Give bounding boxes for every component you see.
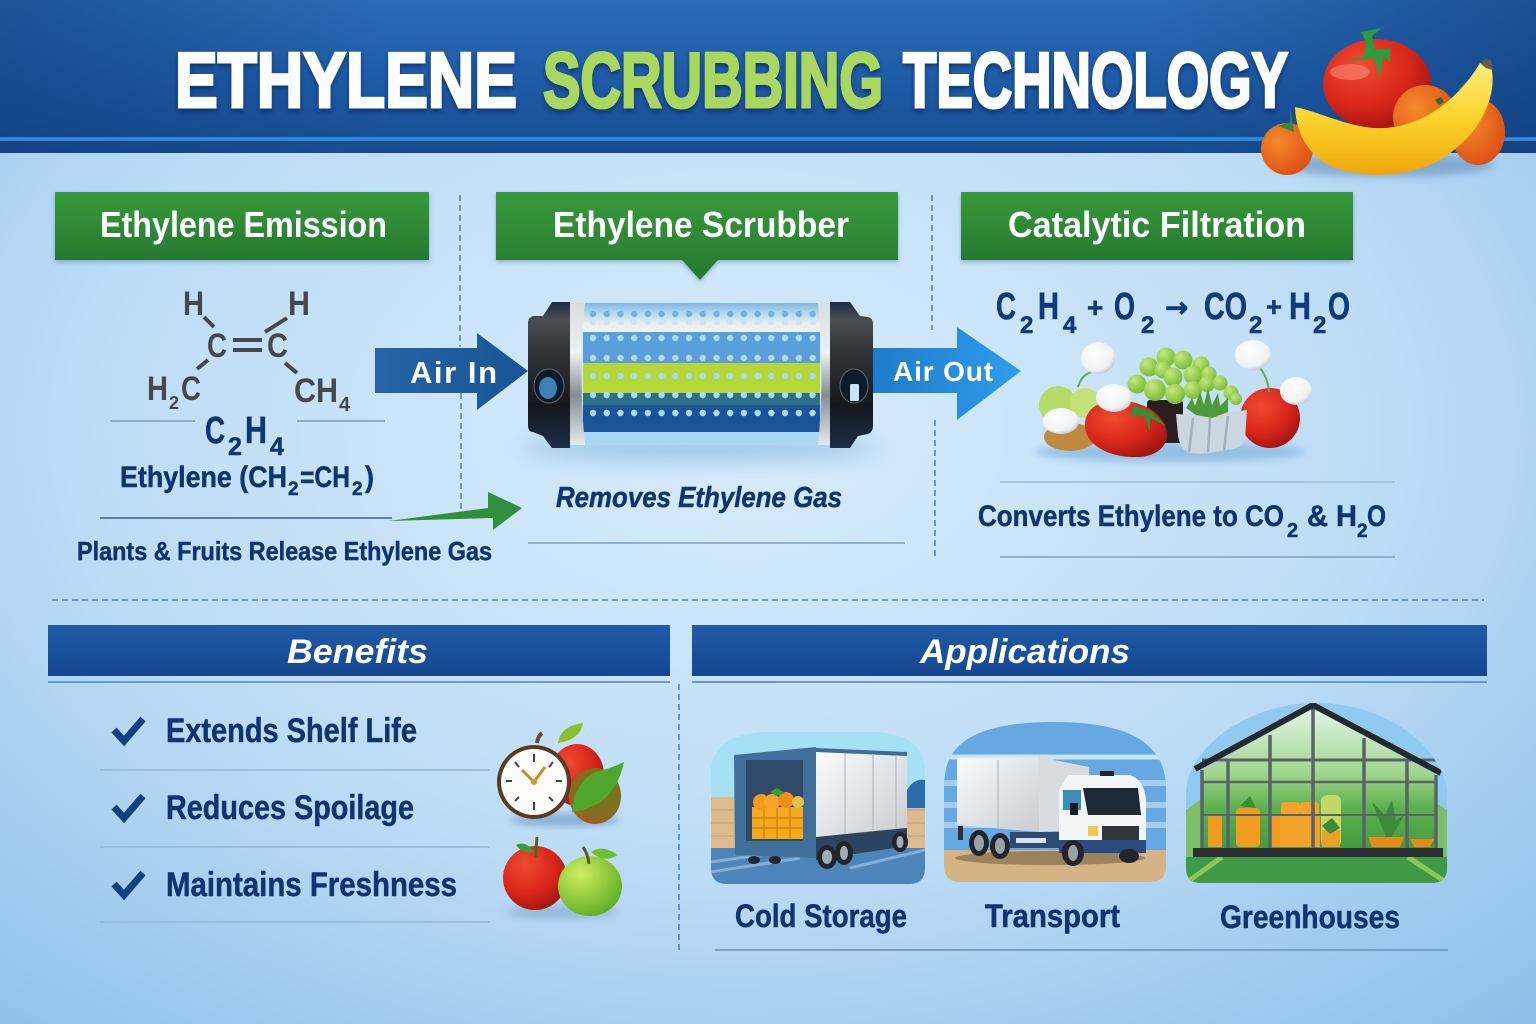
label: cold storage: Cold Storage <box>735 898 907 934</box>
text: plants and fruits: Plants & Fruits Release Ethylene Gas <box>77 536 492 566</box>
icon: fruit pile <box>1261 28 1505 177</box>
text: converts ethylene: 2 <box>1287 520 1298 542</box>
text: converts ethylene <box>978 500 1386 542</box>
formula: C2H4: 2 <box>228 433 242 461</box>
heading: applications <box>692 625 1487 682</box>
formula: C2H4: 4 <box>270 433 284 461</box>
equation: 2 <box>1141 312 1154 339</box>
equation: CO <box>1204 286 1247 328</box>
title: TECHNOLOGY <box>903 36 1288 124</box>
label: ethylene name: ) <box>365 461 374 494</box>
icon: apples <box>503 837 622 919</box>
panel: applications <box>692 625 1487 950</box>
molecule: ethylene structure: 2 <box>169 393 179 413</box>
panel: ethylene scrubber <box>496 192 905 543</box>
molecule: ethylene structure: H <box>147 370 168 408</box>
arrow: air in: Air In <box>410 355 497 390</box>
panel: benefits <box>48 625 670 922</box>
molecule: ethylene structure: C <box>207 327 227 365</box>
text: converts ethylene: & H <box>1307 500 1357 533</box>
molecule: ethylene structure: CH <box>294 372 338 410</box>
title: SCRUBBING <box>543 36 883 124</box>
molecule: ethylene structure: C <box>181 370 201 408</box>
text: converts ethylene: Converts Ethylene to CO <box>978 500 1284 533</box>
equation: + <box>1266 292 1282 322</box>
molecule: ethylene structure <box>147 285 351 416</box>
heading: applications: Applications <box>919 633 1130 671</box>
equation: C <box>996 286 1016 328</box>
formula: C2H4: C <box>205 410 225 452</box>
equation: H <box>1289 286 1311 328</box>
molecule: ethylene structure: H <box>288 285 310 323</box>
illustration: transport truck <box>944 722 1166 882</box>
panel: ethylene emission <box>55 192 522 566</box>
heading: ethylene emission <box>55 192 429 260</box>
heading: ethylene scrubber: Ethylene Scrubber <box>553 204 849 245</box>
heading: ethylene emission: Ethylene Emission <box>100 204 387 245</box>
arrow: air out <box>873 327 1021 420</box>
dashed dividers <box>52 195 1484 950</box>
equation: 2 <box>1313 312 1326 339</box>
arrow: air in <box>375 333 528 410</box>
icon: clock with fruit <box>497 723 624 826</box>
benefit: maintains freshness: Maintains Freshness <box>166 866 457 904</box>
illustration: cold storage truck <box>711 732 925 884</box>
benefit: extends shelf life: Extends Shelf Life <box>166 712 417 750</box>
molecule: ethylene structure: 4 <box>339 394 351 416</box>
icon: produce group <box>1035 340 1312 462</box>
heading: benefits: Benefits <box>287 633 428 671</box>
text: removes ethylene gas: Removes Ethylene Gas <box>556 482 842 514</box>
label: greenhouses: Greenhouses <box>1220 899 1400 935</box>
equation: H <box>1038 286 1059 328</box>
heading: catalytic filtration: Catalytic Filtration <box>1008 204 1306 245</box>
equation: 2 <box>1249 312 1262 339</box>
panel: catalytic filtration <box>961 192 1395 557</box>
equation: 4 <box>1063 312 1077 339</box>
equation: 2 <box>1020 312 1033 339</box>
benefit: reduces spoilage: Reduces Spoilage <box>166 789 414 827</box>
arrow: air out: Air Out <box>893 356 993 387</box>
title <box>175 36 1288 124</box>
formula: C2H4: H <box>245 410 267 452</box>
label: ethylene name: Ethylene (CH <box>120 461 287 494</box>
equation: O <box>1114 286 1135 328</box>
heading: ethylene scrubber <box>496 192 898 280</box>
heading: catalytic filtration <box>961 192 1353 260</box>
illustration: greenhouse <box>1186 703 1447 883</box>
label: ethylene name: 2 <box>352 479 363 500</box>
scrubber device <box>520 302 880 462</box>
arrow: green release arrow <box>389 492 522 530</box>
equation <box>996 286 1350 339</box>
header band <box>0 0 1536 153</box>
label: ethylene name: =CH <box>300 461 350 494</box>
label: transport: Transport <box>985 898 1120 934</box>
molecule: ethylene structure: H <box>183 285 204 323</box>
text: converts ethylene: O <box>1367 500 1386 533</box>
equation: O <box>1328 286 1350 328</box>
equation: + <box>1087 292 1103 323</box>
heading: benefits <box>48 625 670 682</box>
equation: → <box>1165 291 1188 324</box>
label: ethylene name <box>120 461 374 500</box>
formula: C2H4 <box>205 410 284 461</box>
text: converts ethylene: 2 <box>1357 521 1368 542</box>
molecule: ethylene structure: C <box>267 327 288 365</box>
label: ethylene name: 2 <box>288 479 299 500</box>
title: ETHYLENE <box>175 36 517 124</box>
